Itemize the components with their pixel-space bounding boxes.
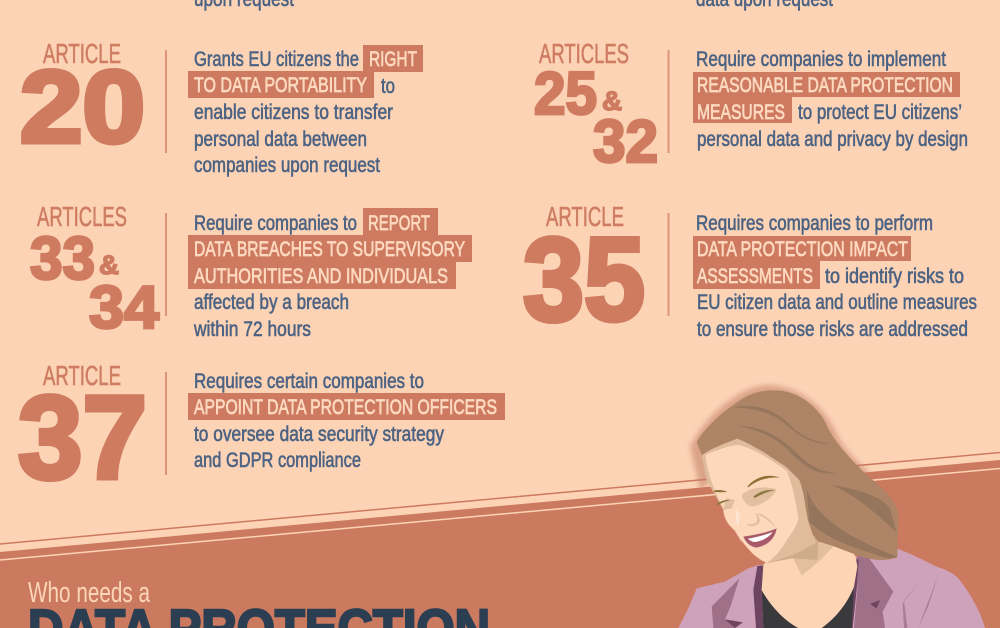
ampersand: &: [99, 250, 119, 280]
highlight: reasonable data protection: [693, 72, 960, 97]
description text: to identify risks to: [825, 265, 964, 288]
description text: [194, 370, 497, 472]
description text: DATA PROTECTION IMPACT: [697, 238, 908, 261]
mouth: [743, 528, 777, 548]
panel: article 20: [20, 38, 423, 177]
heading: article 37 label: ARTICLE: [43, 360, 121, 391]
description text: within 72 hours: [193, 318, 311, 341]
heading: articles 25 and 32 label: ARTICLES: [539, 38, 629, 69]
number: 20: 20: [20, 50, 145, 164]
diagonal terracotta band: [0, 452, 1000, 628]
highlight: right: [363, 45, 423, 72]
right lapel fold: [870, 600, 880, 609]
black top: [762, 587, 854, 628]
heading: article 35 label: ARTICLE: [546, 201, 624, 232]
description text: DATA BREACHES TO SUPERVISORY: [194, 238, 465, 261]
description text: [696, 212, 977, 341]
hair: [697, 390, 898, 560]
description text: APPOINT DATA PROTECTION OFFICERS: [194, 396, 497, 419]
description text: RIGHT: [369, 48, 417, 71]
left lapel fold: [725, 619, 743, 628]
panel: article 35: [523, 201, 977, 346]
hair glow: [690, 385, 870, 493]
dark collar edges: [753, 558, 859, 628]
highlight: to data portability: [188, 71, 374, 98]
jacket: [678, 548, 985, 628]
description text: TO DATA PORTABILITY: [194, 74, 367, 97]
left lapel shadow: [712, 578, 743, 628]
description text: Require companies to implement: [696, 48, 946, 71]
illustration: smiling woman: [678, 385, 985, 628]
description text: to oversee data security strategy: [194, 423, 444, 446]
description text: Requires certain companies to: [194, 370, 424, 393]
highlight: appoint data protection officers: [188, 393, 505, 420]
number: 33: 33: [30, 225, 95, 292]
face: [706, 445, 798, 563]
sleeve folds: [903, 577, 938, 628]
panel: articles 33 and 34: [30, 201, 472, 341]
description text: Grants EU citizens the: [194, 48, 359, 71]
eyebrows: [714, 476, 780, 492]
description text: REPORT: [368, 212, 430, 235]
nose: [746, 512, 760, 526]
highlight: report: [363, 208, 438, 236]
eye socket shadows: [723, 487, 777, 510]
description text: AUTHORITIES AND INDIVIDUALS: [194, 265, 448, 288]
description text: personal data between: [194, 128, 367, 151]
jacket and top, shifted to body coordinates: [678, 530, 985, 628]
panel: articles 25 and 32: [534, 38, 968, 175]
description text: to: [381, 75, 395, 98]
description text: to protect EU citizens’: [798, 101, 962, 124]
description text: ASSESSMENTS: [697, 265, 813, 288]
neck shadow: [767, 530, 833, 576]
highlight: assessments: [693, 261, 820, 289]
divider: [668, 213, 670, 316]
intro text: who needs a: Who needs a: [28, 577, 151, 609]
highlight: data breaches to supervisory: [188, 235, 472, 262]
smile line: [758, 513, 776, 528]
right lapel shadow: [854, 555, 893, 628]
divider: [165, 213, 167, 316]
highlight: authorities and individuals: [188, 262, 456, 289]
number: 32: 32: [593, 108, 658, 175]
heading: article 20 label: ARTICLE: [43, 38, 121, 69]
panel: article 37: [18, 360, 505, 504]
teeth: [748, 532, 773, 542]
divider: [165, 50, 167, 153]
ampersand: &: [602, 86, 622, 116]
neck shadow deep: [767, 530, 818, 563]
face shadow: [702, 439, 817, 563]
number: 35: 35: [523, 214, 645, 346]
description text: and GDPR compliance: [194, 449, 361, 472]
description text: [194, 48, 417, 177]
description text: [696, 48, 968, 151]
closed eyes: [716, 490, 775, 505]
description text: affected by a breach: [194, 291, 349, 314]
highlight: measures: [693, 97, 792, 123]
number: 37: 37: [18, 372, 147, 504]
heading: articles 33 and 34 label: ARTICLES: [37, 201, 127, 232]
number: 34: 34: [89, 274, 160, 341]
highlight: data protection impact: [693, 236, 911, 261]
description text: Requires companies to perform: [696, 212, 933, 235]
cheek highlight: [736, 508, 739, 527]
description text: MEASURES: [697, 101, 785, 124]
hair shadow strands: [733, 406, 897, 558]
description text: Require companies to: [194, 212, 357, 235]
neck and chest: [762, 530, 857, 628]
number: 25: 25: [534, 60, 597, 127]
description text: enable citizens to transfer: [194, 101, 393, 124]
divider: [668, 50, 670, 153]
description text: [193, 212, 465, 341]
divider: [165, 372, 167, 475]
description text: companies upon request: [194, 154, 380, 177]
